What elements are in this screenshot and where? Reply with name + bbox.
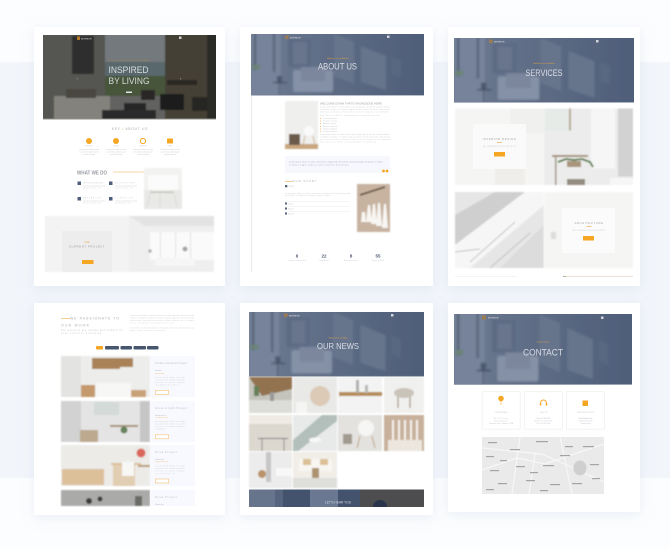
hero title: BY LIVING (108, 76, 150, 87)
portfolio row 3: sed do eiusmod tempor (155, 470, 185, 472)
photo: plant on console (544, 108, 633, 185)
hero subtitle: Welcome to our interior website (108, 59, 151, 62)
news tile: bath (249, 452, 292, 488)
contact card: working hours (566, 392, 604, 429)
hero: living room photo (40, 32, 219, 122)
portfolio row 2: incididunt (155, 428, 166, 430)
about text block: Tempor incididunt (323, 128, 338, 130)
portfolio row 2: Designer Inc (155, 415, 166, 417)
feature 3: sed do eiusmod (137, 154, 149, 156)
about text block: Duis aute irure dolor in reprehenderit in voluptate velit esse (320, 114, 380, 117)
logo (77, 36, 92, 40)
about text block: Lorem ipsum dolor (323, 117, 337, 120)
contact card: address: OUR ADDRESS (494, 411, 508, 414)
hero button (126, 92, 132, 93)
panel: contact page (448, 303, 640, 512)
contact card: address (482, 392, 520, 429)
story content: VISION (288, 186, 295, 188)
logo: INTERIOR (488, 318, 499, 320)
contact card: working hours: Sunday closed (580, 423, 591, 425)
overlay card (562, 208, 615, 253)
feature 2: Lorem ipsum dolor sit amet (106, 148, 127, 151)
news tile: white chair (338, 415, 382, 451)
title: SERVICES (526, 68, 562, 78)
news tile: kitchen tap (249, 377, 292, 413)
overlay card (473, 124, 526, 169)
hero title (108, 65, 150, 87)
subtitle: Welcome to our Website (327, 57, 350, 60)
story content: Support (288, 212, 294, 216)
story content: incididunt ut labore et dolore magna aliqua (285, 194, 330, 197)
stats row (288, 254, 384, 262)
contact card: call us (524, 392, 562, 429)
hero: contact (449, 308, 637, 391)
panel: home page (34, 27, 225, 286)
portfolio row 2 (61, 401, 195, 442)
logo (482, 316, 499, 320)
what we do list: Lorem ipsum dolor sit amet (115, 184, 138, 188)
contact card: working hours: Monday–Friday: 9am–5pm (578, 417, 593, 420)
contact card: working hours: Saturday: 9am–1pm (578, 420, 593, 422)
portfolio row 1: sed do eiusmod tempor (155, 381, 185, 384)
hero: services (449, 33, 639, 108)
portfolio row 1: consectetur adipiscing elit (155, 378, 186, 382)
quote callout: et dolore magna aliqua ut enim ad minim veniam quis (289, 164, 349, 166)
intro text: ex ea commodo consequat duis aute (130, 322, 174, 324)
news tile: desk (249, 415, 292, 451)
tile text: INTERIOR DESIGN (483, 137, 516, 141)
tile text (572, 221, 606, 232)
contact banner (249, 490, 424, 507)
quote callout (285, 156, 390, 173)
title: ABOUT US (318, 62, 357, 72)
stats row: 6 (296, 254, 299, 258)
logo (489, 40, 505, 44)
stats row: Trade Areas (319, 259, 329, 262)
feature 1: consectetur adipiscing elit (80, 150, 99, 154)
quote callout: Lorem ipsum dolor sit amet consectetur adipiscing elit sed do eiusmod tempor incididunt ut labore (289, 160, 383, 164)
what we do list: Lorem ipsum dolor sit amet (115, 200, 138, 202)
portfolio row 3: incididunt ut (155, 472, 176, 475)
contact card: address: No. 123 Lorem (494, 417, 509, 420)
intro text: tempor incididunt ut labore et dolore magna aliqua ut enim ad minim (130, 316, 195, 320)
menu icon (596, 40, 598, 42)
story content: Mission (288, 208, 294, 210)
about text block: Sed do eiusmod (323, 126, 337, 128)
about text block: nostrud exercitation ullamco laboris nisi ut aliquip ex ea commodo (320, 138, 390, 141)
menu icon (387, 36, 390, 38)
heading: we passionate to our work: Our projects are unique and modern for (61, 329, 123, 332)
stats row: 8 (350, 254, 353, 258)
contact card: call us: Phone: 01 2345 6789 (536, 418, 551, 420)
feature 2: consectetur adipiscing elit (106, 150, 126, 154)
contact card: call us: Fax: 01 2345 6789 (536, 423, 551, 425)
quote marks (382, 170, 388, 172)
about text block (320, 102, 390, 144)
logo: INTERIOR (289, 316, 300, 318)
feature 4: consectetur adipiscing elit (160, 150, 180, 154)
photo: white dining room (144, 168, 182, 209)
portfolio row 1: incididunt ut labore (155, 384, 179, 386)
subtitle: Welcome to our Website (533, 62, 556, 65)
what we do list: consectetur elit (115, 202, 132, 204)
feature 1: HISTORY (85, 146, 94, 148)
features row (79, 138, 181, 156)
tile text: ARCHITECTURE (574, 221, 604, 225)
portfolio row 2: consectetur adipiscing elit (155, 422, 186, 426)
news tile: wicker chair (293, 377, 337, 413)
portfolio row 1: Interior (155, 369, 162, 372)
what we do list: consectetur elit (83, 202, 102, 204)
portfolio row 4 (61, 490, 195, 506)
stats row: 22 (321, 254, 327, 258)
slider arrows: › (180, 76, 182, 81)
what we do list: PLANNING (115, 196, 134, 200)
feature 3: MISSION (139, 146, 147, 148)
logo: INTERIOR (290, 38, 301, 40)
project button (82, 260, 94, 264)
project overlay card (62, 231, 112, 272)
tile: interior design (455, 108, 544, 185)
news tile: wood shelf tap (338, 377, 382, 413)
about text block: Lorem ipsum dolor sit amet consectetur adipiscing elit sed do eiusmod tempor (320, 106, 390, 108)
photo: chair by wall (285, 101, 318, 149)
feature 3 (133, 138, 154, 156)
portfolio row 3: Chairs Inc (155, 459, 164, 461)
map (482, 437, 604, 494)
photo: architecture ribs (455, 192, 544, 268)
stats row: Hours of Work (372, 259, 384, 262)
intro text: Irure dolor in reprehenderit in voluptate velit esse cillum dolore eu (130, 326, 194, 330)
tile: architecture (544, 192, 633, 268)
about text block: incididunt ut labore et dolore magna aliqua ut enim ad minim veniam quis (320, 108, 390, 111)
intro text (130, 314, 195, 332)
heading: we passionate to our work: OUR WORK (61, 324, 90, 328)
news tile: sofa (293, 452, 337, 488)
contact card: call us: Mobile: 01 2345 6789 (534, 420, 553, 422)
about text block: Adipiscing elit (323, 122, 337, 125)
portfolio row 2: Lorem ipsum dolor sit amet (155, 420, 186, 423)
heading: what we do: WHAT WE DO (77, 170, 108, 176)
title: CONTACT (523, 348, 563, 358)
portfolio row 1: Tenbici Housing Project (155, 361, 187, 365)
hero: our news (244, 307, 429, 382)
news tile: pendant lights (384, 415, 424, 451)
feature 4: sed do eiusmod (164, 154, 176, 156)
heading: key about us: KEY / ABOUT US (112, 127, 148, 131)
panel: current project (45, 216, 214, 272)
subtitle: Keep in touch (537, 340, 549, 344)
logo (284, 314, 300, 318)
slider arrows (76, 76, 182, 81)
contact card: address: Mountain View, California, USA (489, 422, 514, 425)
story content: Lorem ipsum dolor sit amet consectetur adipiscing elit sed do eiusmod (285, 192, 350, 195)
contact card: address: Ipsum Dolor Sit (494, 420, 508, 422)
about text block: WELCOME DOWN THAT'S KNOWLEDGE HERE (320, 102, 382, 106)
news photo grid (249, 377, 424, 488)
intro text: veniam quis nostrud exercitation ullamco laboris nisi ut aliquip (130, 319, 194, 322)
photo: pendant lamps (357, 184, 390, 232)
feature 4 (160, 138, 181, 156)
project title (69, 240, 105, 248)
what we do list: Lorem ipsum dolor sit amet (83, 184, 106, 188)
feature 1: Lorem ipsum dolor sit amet (79, 148, 100, 151)
portfolio row 4: Chairs Inc (155, 504, 164, 506)
stats row: Satisfied Clients (344, 259, 358, 262)
logo (285, 36, 301, 40)
what we do list: INTERIOR DESIGN (83, 182, 104, 184)
feature 4: GOAL (168, 144, 172, 148)
footer strips (455, 275, 633, 278)
hero title: INSPIRED (108, 65, 149, 76)
portfolio row 2: Home & light Project (155, 406, 187, 410)
about text block: incididunt ut labore et dolore magna aliqua ut enim ad minim veniam quis (320, 136, 390, 138)
story content: History (288, 202, 293, 206)
stats row: 55 (375, 254, 381, 258)
about text block: Ut labore dolore (323, 130, 337, 133)
panel: news page (240, 303, 433, 515)
filter buttons (96, 346, 158, 350)
what we do list: DECORATION (83, 196, 102, 200)
menu icon (391, 314, 394, 316)
portfolio row 4: Nova Project (155, 495, 177, 499)
contact card: working hours: WORKING HOURS (577, 412, 595, 414)
heading: we passionate to our work (61, 316, 123, 335)
title: OUR NEWS (317, 341, 359, 351)
heading: we passionate to our work: WE PASSIONATE TO (70, 316, 119, 320)
portfolio row 1: Lorem ipsum dolor sit amet (155, 376, 186, 379)
what we do list: Lorem ipsum dolor sit amet (83, 200, 106, 202)
about text block: Duis aute irure dolor in reprehenderit in voluptate (320, 140, 376, 144)
heading: we passionate to our work: your specific problems (61, 332, 102, 335)
tile text: ALL INTERIOR DECOR PROJECTS (572, 229, 606, 232)
intro text: fugiat nulla pariatur excepteur (130, 329, 166, 332)
stats row: Projects Completed (288, 259, 306, 262)
feature 2 (106, 138, 127, 156)
contact card: call us: CALL US (540, 411, 548, 414)
what we do list: consectetur elit (83, 186, 102, 190)
feature 3: consectetur adipiscing elit (134, 150, 153, 154)
intro text: Lorem ipsum dolor sit amet consectetur adipiscing elit sed do eiusmod (130, 314, 194, 317)
panel: portfolio page (34, 303, 225, 515)
feature 2: sed do eiusmod (110, 154, 122, 156)
heading: what we do (77, 170, 145, 176)
subtitle: Welcome to our Blog (329, 336, 347, 340)
feature 1: sed do eiusmod (83, 154, 95, 156)
about text block: Sit amet consec (323, 120, 337, 122)
banner title: LET'S HEAR YOU (325, 500, 352, 504)
what we do list (78, 182, 138, 204)
about text block: nostrud exercitation ullamco laboris nisi ut aliquip ex ea commodo (320, 110, 388, 114)
news tile: ceiling lamp (293, 415, 337, 451)
slider arrows: ‹ (76, 76, 78, 81)
what we do list: ARCHITECTURE (115, 182, 136, 184)
project title: Our (84, 240, 90, 244)
heading: our story: OUR STORY (292, 179, 317, 183)
tile button (583, 236, 594, 240)
tile button (494, 152, 505, 156)
menu icon (179, 36, 182, 39)
tile text: ALL INTERIOR DECOR PROJECTS (483, 145, 517, 148)
menu icon (601, 316, 604, 319)
feature 2: VISION (113, 146, 120, 148)
logo: INTERIOR (494, 42, 505, 44)
logo: INTERIOR (81, 38, 92, 40)
story content (285, 185, 350, 216)
panel: services page (448, 27, 640, 286)
news tile: stool (384, 377, 424, 413)
portfolio row 3: Lorem ipsum dolor sit amet (155, 464, 186, 468)
about text block: Lorem ipsum dolor sit amet consectetur adipiscing elit sed do eiusmod tempor (320, 133, 390, 136)
panel: about us page (240, 27, 433, 286)
hero: about us (246, 29, 429, 100)
left vertical rule (250, 96, 253, 272)
portfolio row 3: Nova Project (155, 450, 177, 454)
what we do list: consectetur elit (115, 186, 134, 190)
portfolio row 1 (61, 356, 195, 397)
tile text (483, 137, 517, 148)
feature 4: Lorem ipsum dolor sit amet (160, 148, 181, 151)
feature 3: Lorem ipsum dolor sit amet (133, 148, 154, 151)
portfolio row 3: consectetur adipiscing elit (155, 467, 186, 470)
feature 1 (79, 138, 100, 156)
project title: CURRENT PROJECT (69, 244, 105, 248)
portfolio row 2: sed do eiusmod tempor (155, 425, 185, 428)
portfolio row 3 (61, 445, 195, 486)
